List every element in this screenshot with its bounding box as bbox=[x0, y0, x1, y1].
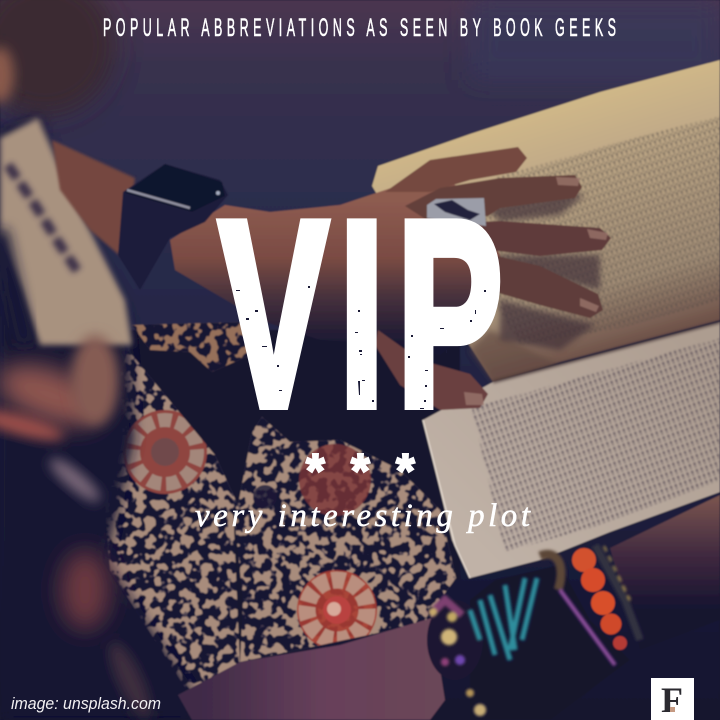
main abbreviation: VIP: V bbox=[219, 166, 328, 461]
flower left bbox=[123, 410, 207, 494]
lower forearm bbox=[178, 618, 445, 720]
red flower behind asterisks bbox=[299, 444, 371, 516]
open book: upper page bbox=[372, 60, 720, 382]
patterned skirt bbox=[100, 320, 460, 695]
finger: ring finger bbox=[405, 175, 582, 222]
thumb bbox=[375, 330, 488, 410]
logo bbox=[651, 678, 694, 720]
finger: little bbox=[495, 256, 603, 318]
blurred sleeve on the left bbox=[0, 47, 195, 720]
title: POPULAR ABBREVIATIONS AS SEEN BY BOOK GEEKS bbox=[103, 14, 616, 42]
finger: index bbox=[385, 147, 527, 192]
fingernails bbox=[464, 177, 608, 405]
hand and forearm bbox=[52, 140, 611, 410]
finger: middle bbox=[480, 221, 611, 256]
distress speckles bbox=[236, 286, 486, 409]
smartwatch bbox=[118, 164, 228, 290]
main abbreviation: VIP bbox=[219, 166, 503, 462]
bracelets bbox=[427, 545, 640, 720]
logo: F bbox=[661, 680, 683, 720]
main abbreviation: VIP: P bbox=[397, 167, 503, 462]
three asterisks: *** bbox=[306, 445, 415, 498]
ring bbox=[427, 198, 486, 226]
open book: lower page bbox=[423, 322, 720, 578]
subtitle: very interesting plot bbox=[195, 498, 531, 534]
right forearm bbox=[610, 495, 720, 650]
image credit: image: unsplash.com bbox=[11, 695, 161, 713]
flower right bbox=[297, 570, 377, 650]
main abbreviation: VIP: I bbox=[339, 166, 384, 461]
shadows of fingers on page bbox=[470, 190, 600, 350]
